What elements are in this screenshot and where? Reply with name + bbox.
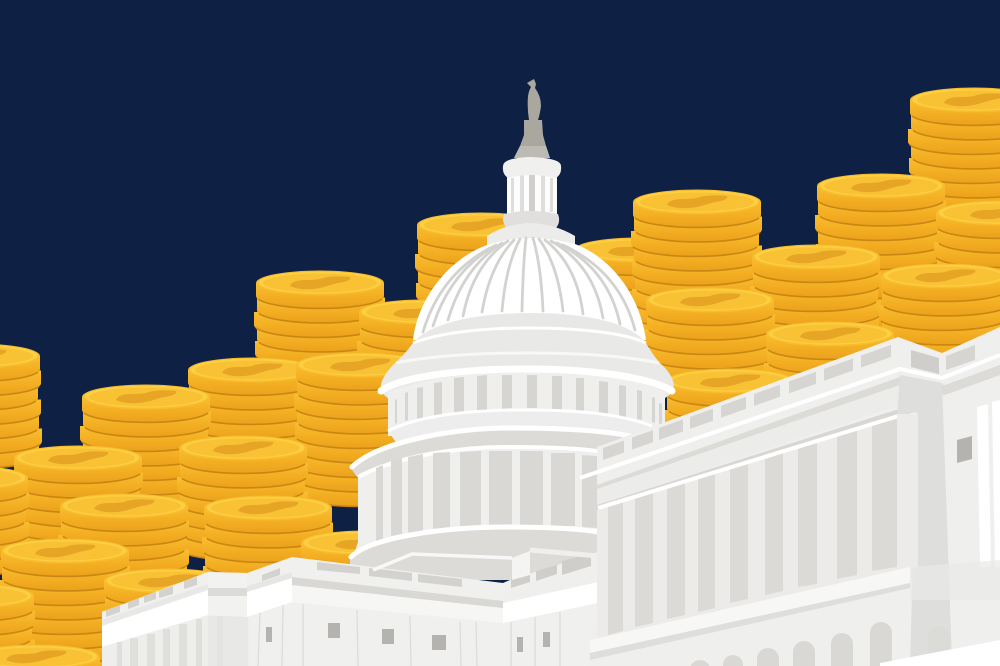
coin stack right edge [934, 200, 1000, 296]
coin stack above roof [664, 368, 795, 464]
coin stack left edge [0, 344, 42, 468]
centre windows [266, 623, 446, 650]
coin stack left centre [177, 436, 309, 560]
parapet panels [603, 345, 975, 460]
dome cap ring [487, 223, 575, 250]
centre parapet panels [317, 562, 462, 587]
coin stack middle left back [186, 358, 318, 482]
pavilion shaded corner [897, 375, 952, 666]
dome ring tiers [381, 313, 674, 402]
centre wall lines [258, 604, 477, 666]
roof terrace [416, 558, 512, 578]
lower drum with columns [350, 410, 652, 580]
white cornice lines [580, 355, 1000, 508]
coin stack front centre [202, 496, 333, 592]
coin stack behind dome right [572, 238, 704, 348]
right wing [580, 327, 1000, 666]
colonnade [597, 410, 918, 640]
pavilion stripes [977, 400, 1000, 567]
coin stack lower right [879, 264, 1000, 374]
pavilion window [957, 436, 972, 463]
statue on dome [514, 79, 550, 158]
coin stack bottom left [0, 538, 131, 666]
coin stack far right top [908, 88, 1000, 227]
arches [690, 622, 950, 666]
upper drum with columns [381, 369, 672, 436]
foreground white wedge [880, 640, 1000, 666]
lantern [503, 157, 561, 228]
coin stack far left [12, 446, 144, 570]
coin stack right tall [815, 174, 947, 328]
coin stack in front of centre right [644, 288, 776, 398]
centre block fascia [292, 585, 503, 623]
coin stack front left [58, 494, 190, 604]
dome [413, 238, 646, 340]
coin stack behind dome left [415, 212, 547, 323]
coin stack bottom corner [0, 644, 101, 666]
coin stack left centre back [80, 384, 212, 524]
coin stack centre right [631, 190, 763, 344]
left wing [102, 554, 512, 666]
coin stack bottom left edge [0, 584, 35, 665]
coin stack near dome [357, 300, 488, 381]
coin stack beside dome drum [294, 352, 426, 506]
left wing parapet panels [106, 568, 280, 617]
entablature bands [597, 365, 1000, 500]
coin stack above right wing [764, 322, 895, 403]
coin stack left of dome [254, 270, 386, 396]
capitol building [102, 79, 1000, 666]
left wing fascia [102, 587, 208, 647]
coin stack by left wing [102, 568, 233, 650]
coin stack left edge middle [0, 466, 30, 576]
left wing colonnade [102, 615, 250, 666]
coin stack beside centre right [750, 244, 882, 370]
coin stack by dome base [299, 530, 430, 612]
centre front block [503, 550, 598, 666]
plinth [590, 560, 1000, 660]
